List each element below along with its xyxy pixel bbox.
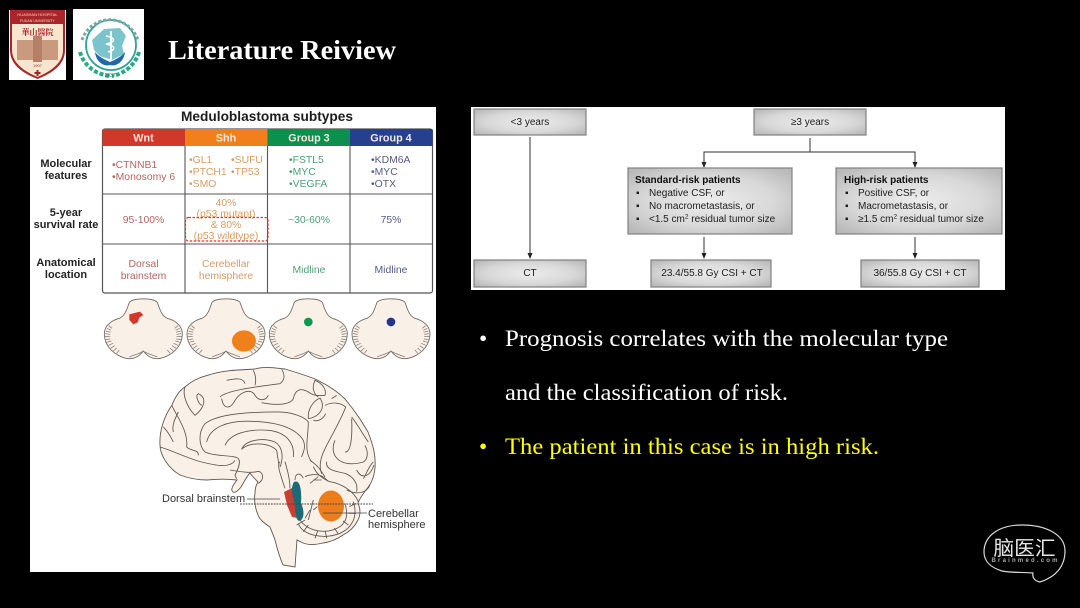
row labels: 5-year bbox=[50, 207, 83, 219]
table header: Group 3 bbox=[288, 132, 330, 144]
box: 3 years or over bbox=[754, 109, 866, 135]
box: high-risk patients: ▪ bbox=[845, 214, 849, 225]
Shh column bbox=[189, 155, 263, 282]
Wnt column: Dorsal bbox=[128, 259, 159, 270]
Group 4 column: •KDM6A bbox=[371, 155, 411, 166]
box: standard-risk patients: 2 bbox=[685, 214, 689, 220]
cerebellum diagrams bbox=[104, 299, 430, 359]
Group 3 column bbox=[288, 155, 330, 276]
table header: Shh bbox=[216, 132, 236, 144]
Wnt column: •Monosomy 6 bbox=[112, 172, 175, 183]
box: under 3 years: <3 years bbox=[511, 117, 549, 128]
table header bbox=[102, 129, 432, 146]
box: standard-risk patients: No macrometastasis, or bbox=[649, 201, 755, 212]
logo: Huashan Hospital: HUASHAN HOSPITAL bbox=[17, 12, 58, 17]
Wnt column: 95-100% bbox=[123, 215, 164, 226]
logo: Brainmed watermark: 脑医汇 bbox=[994, 532, 1056, 561]
box: standard-risk patients: Standard-risk patients bbox=[635, 175, 741, 186]
Group 3 column: Midline bbox=[293, 265, 326, 276]
Shh column: (p53 wildtype) bbox=[194, 231, 258, 242]
subtype table bbox=[34, 129, 432, 293]
box: CT: CT bbox=[523, 268, 537, 279]
box: high-risk patients: ▪ bbox=[845, 188, 849, 199]
box: high-risk patients: Positive CSF, or bbox=[858, 188, 930, 199]
logo: Brainmed watermark bbox=[984, 525, 1065, 582]
label: Cerebellar hemisphere: Cerebellar bbox=[368, 508, 419, 520]
Group 4 column: Midline bbox=[375, 265, 408, 276]
Shh column: •SMO bbox=[189, 179, 216, 190]
cerebellum: Shh bbox=[187, 299, 265, 359]
bullet: prognosis: Prognosis correlates with the molecular type bbox=[505, 326, 948, 352]
arrows: risk groups to treatment bbox=[702, 237, 918, 259]
Group 3 column: ~30-60% bbox=[288, 215, 330, 226]
panel: meduloblastoma subtypes figure bbox=[30, 107, 436, 572]
Wnt column: •CTNNB1 bbox=[112, 160, 157, 171]
Group 4 column: •OTX bbox=[371, 179, 396, 190]
logo: Huashan Hospital: FUDAN UNIVERSITY bbox=[20, 19, 56, 23]
table header: Group 4 bbox=[370, 132, 412, 144]
box: high-risk patients: 2 bbox=[894, 214, 898, 220]
cerebellum: Wnt bbox=[104, 299, 182, 359]
box: standard-risk patients: residual tumor size bbox=[688, 214, 776, 225]
row labels: Molecular bbox=[40, 158, 92, 170]
row labels bbox=[34, 158, 98, 281]
box: under 3 years bbox=[474, 109, 586, 135]
box: 3 years or over: ≥3 years bbox=[791, 117, 829, 128]
cerebellum: Group 3 bbox=[269, 299, 347, 359]
lower brain structures bbox=[230, 462, 374, 538]
box: standard-risk patients: ▪ bbox=[636, 214, 640, 225]
logo: Huashan Hospital: 1907 bbox=[33, 63, 43, 68]
label: Dorsal brainstem: Dorsal brainstem bbox=[162, 493, 245, 505]
panel: treatment flowchart bbox=[471, 107, 1005, 290]
text block: conclusions bbox=[479, 326, 948, 460]
brain silhouette bbox=[160, 367, 375, 567]
box: standard-risk patients: ▪ bbox=[636, 188, 640, 199]
bullet: patient risk: • bbox=[479, 434, 487, 460]
label: Cerebellar hemisphere: hemisphere bbox=[368, 519, 425, 531]
box: standard-risk treatment: 23.4/55.8 Gy CSI + CT bbox=[661, 268, 763, 279]
logo: teal hospital emblem bbox=[73, 9, 144, 80]
bullet: prognosis bbox=[479, 326, 948, 406]
box: CT bbox=[474, 260, 586, 287]
Group 3 column: •FSTL5 bbox=[289, 155, 324, 166]
box: high-risk treatment bbox=[861, 260, 979, 287]
box: high-risk patients bbox=[836, 168, 1002, 234]
Shh column: •SUFU bbox=[231, 155, 263, 166]
box: high-risk treatment: 36/55.8 Gy CSI + CT bbox=[873, 268, 967, 279]
Shh column: •GL1 bbox=[189, 155, 212, 166]
logo: Brainmed watermark: Brainmed.com bbox=[992, 558, 1058, 564]
logo: Huashan Hospital: 華山醫院 bbox=[22, 27, 54, 38]
box: high-risk patients: ▪ bbox=[845, 201, 849, 212]
box: high-risk patients: High-risk patients bbox=[844, 175, 929, 186]
box: standard-risk patients: Negative CSF, or bbox=[649, 188, 725, 199]
Group 4 column bbox=[371, 155, 411, 276]
Wnt column: brainstem bbox=[121, 271, 166, 282]
Shh column: & 80% bbox=[211, 220, 241, 231]
cerebellum: Group 4 bbox=[352, 299, 430, 359]
Group 3 column: •MYC bbox=[289, 167, 316, 178]
box: high-risk patients: ≥1.5 cm bbox=[858, 214, 894, 225]
callout: dashed highlight bbox=[186, 218, 268, 241]
box: standard-risk patients bbox=[628, 168, 792, 234]
box: high-risk patients: residual tumor size bbox=[897, 214, 984, 225]
box: standard-risk patients: <1.5 cm bbox=[649, 214, 685, 225]
Shh column: (p53 mutant) bbox=[197, 209, 255, 220]
heading: Medulloblastoma subtypes: Meduloblastoma subtypes bbox=[181, 109, 353, 124]
cerebrum gyri bbox=[160, 369, 373, 479]
Wnt column bbox=[112, 160, 175, 282]
Shh column: hemisphere bbox=[199, 271, 253, 282]
row labels: Anatomical bbox=[36, 257, 96, 269]
box: standard-risk patients: ▪ bbox=[636, 201, 640, 212]
logo: teal hospital emblem: 1937 bbox=[104, 73, 116, 79]
row labels: survival rate bbox=[34, 219, 98, 231]
arrow: under 3 to CT bbox=[528, 137, 532, 259]
bullet: patient risk: The patient in this case is in high risk. bbox=[505, 434, 879, 460]
brain sagittal diagram bbox=[160, 367, 425, 567]
bullet: prognosis: and the classification of risk. bbox=[505, 380, 788, 406]
Shh column: Cerebellar bbox=[202, 259, 251, 270]
tumour: cerebellar hemisphere bbox=[318, 490, 344, 522]
bullet: prognosis: • bbox=[479, 326, 487, 352]
Shh column: •PTCH1 bbox=[189, 167, 227, 178]
tumour: dorsal brainstem bbox=[284, 486, 298, 518]
arrows: split to risk groups bbox=[702, 138, 918, 168]
Shh column: •TP53 bbox=[231, 167, 260, 178]
title: Literature Reiview bbox=[168, 35, 397, 65]
logo: Huashan Hospital bbox=[9, 10, 66, 80]
row labels: features bbox=[45, 170, 87, 182]
Shh column: 40% bbox=[216, 198, 236, 209]
Group 3 column: •VEGFA bbox=[289, 179, 327, 190]
box: standard-risk treatment bbox=[651, 260, 771, 287]
Group 4 column: •MYC bbox=[371, 167, 398, 178]
box: high-risk patients: Macrometastasis, or bbox=[858, 201, 949, 212]
table header: Wnt bbox=[133, 132, 154, 144]
row labels: location bbox=[45, 269, 87, 281]
Group 4 column: 75% bbox=[381, 215, 401, 226]
